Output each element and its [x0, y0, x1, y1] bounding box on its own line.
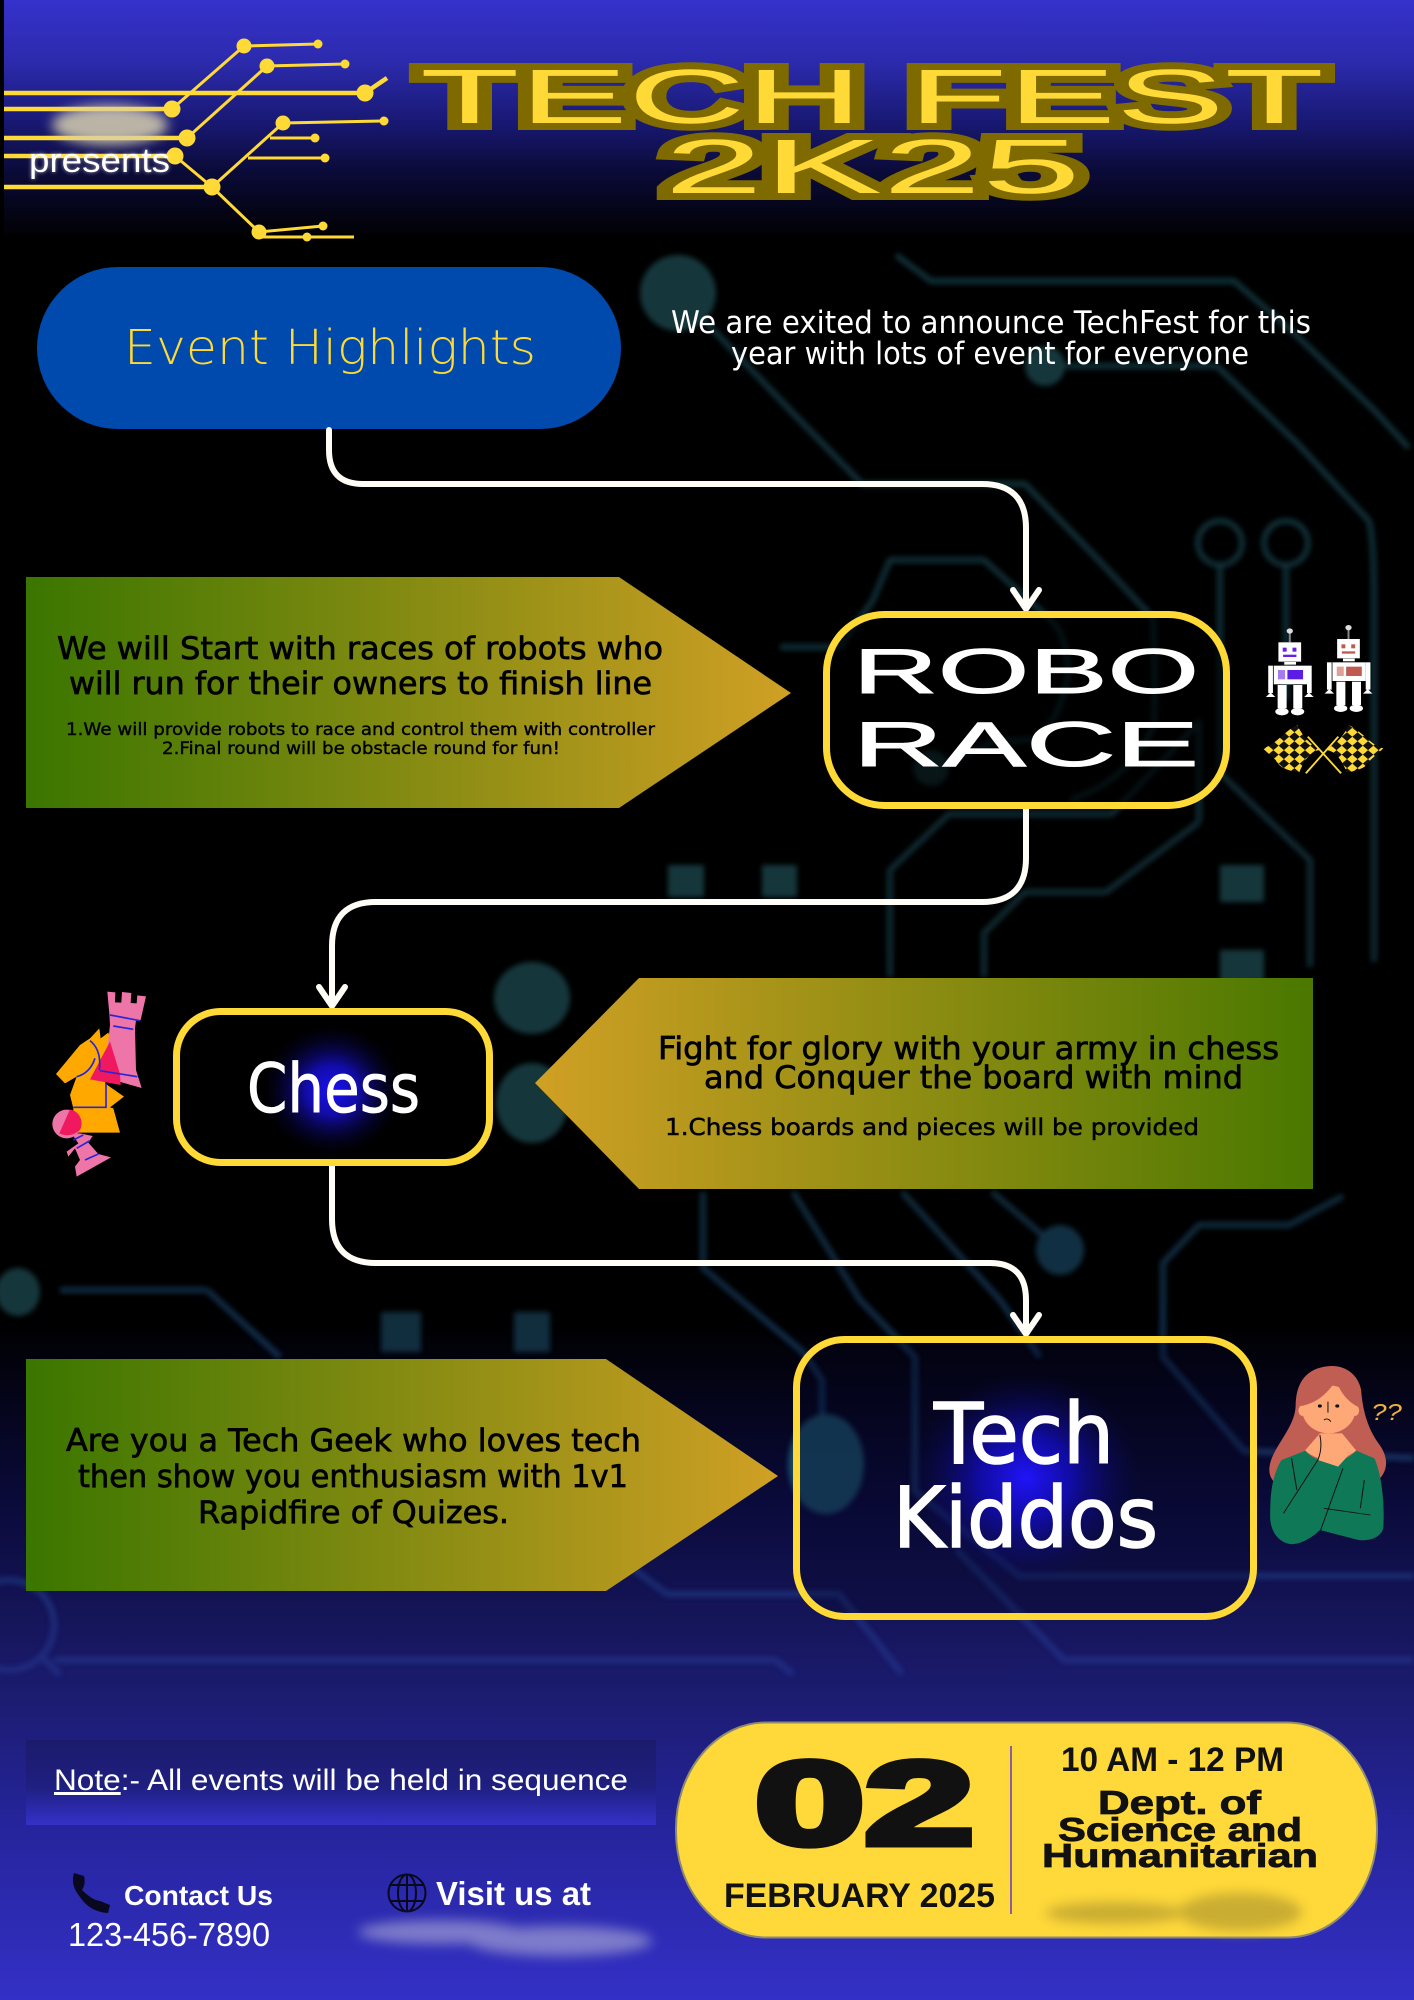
panel: robo race description: 2.Final round will be obstacle round for fun! — [162, 739, 560, 759]
circuit board background pattern — [0, 255, 1414, 1675]
visit us block: Visit us at — [436, 1875, 591, 1912]
arrow: robo race to chess — [319, 809, 1026, 1006]
title: 2K25 — [664, 124, 1081, 210]
title: TECH FEST — [420, 54, 1324, 140]
event highlights pill — [37, 267, 621, 429]
icon: checkered flags — [1263, 725, 1383, 773]
panel: tech kiddos description — [26, 1359, 778, 1591]
panel: chess description: 1.Chess boards and pieces will be provided — [665, 1115, 1199, 1141]
note band: Note:- All events will be held in sequence — [54, 1764, 628, 1797]
event highlights pill: Event Highlights — [124, 320, 536, 376]
tech kiddos box: Kiddos — [893, 1469, 1158, 1567]
date and venue pill: Humanitarian — [1042, 1837, 1318, 1874]
title — [420, 54, 1324, 210]
robo race box: RACE — [853, 710, 1199, 780]
date and venue pill — [676, 1722, 1377, 1938]
date and venue pill: FEBRUARY 2025 — [724, 1877, 995, 1915]
date and venue pill: 10 AM - 12 PM — [1061, 1741, 1284, 1779]
presents label: presents — [29, 142, 170, 180]
robo race box — [826, 614, 1226, 806]
panel: tech kiddos description: then show you enthusiasm with 1v1 — [78, 1459, 628, 1495]
date and venue pill: 02 — [755, 1738, 974, 1870]
icon: chess pieces — [52, 992, 146, 1177]
arrow: highlights to robo race — [329, 430, 1039, 609]
contact us block: 123-456-7890 — [68, 1916, 270, 1953]
icon: thinking girl: ?? — [1371, 1400, 1402, 1425]
redacted smudge over organiser name — [52, 105, 168, 145]
intro text: We are exited to announce TechFest for this — [671, 305, 1311, 341]
chess box — [176, 1012, 490, 1162]
intro text — [671, 305, 1311, 372]
icon: phone — [73, 1873, 110, 1913]
arrow: chess to tech kiddos — [332, 1166, 1039, 1334]
robo race box: ROBO — [853, 637, 1199, 707]
header circuit graphic — [4, 38, 388, 242]
panel: chess description: Fight for glory with your army in chess — [658, 1031, 1279, 1067]
intro text: year with lots of event for everyone — [731, 336, 1249, 372]
note band — [26, 1740, 656, 1825]
panel: robo race description: We will Start with races of robots who — [57, 631, 663, 667]
panel: robo race description: will run for their owners to finish line — [69, 666, 652, 702]
panel: robo race description: 1.We will provide robots to race and control them with controller — [66, 720, 655, 740]
panel: tech kiddos description: Are you a Tech Geek who loves tech — [66, 1423, 641, 1459]
contact us block: Contact Us — [124, 1880, 273, 1911]
contact us block — [68, 1873, 273, 1953]
panel: chess description — [535, 978, 1313, 1189]
tech kiddos box — [796, 1340, 1254, 1616]
date and venue pill: Science and — [1058, 1811, 1302, 1848]
icon: robots — [1266, 625, 1372, 715]
date and venue pill: Dept. of — [1098, 1784, 1262, 1821]
icon: thinking girl — [1269, 1366, 1402, 1544]
presents label: presents — [29, 142, 170, 180]
panel: chess description: and Conquer the board with mind — [704, 1060, 1243, 1096]
panel: tech kiddos description: Rapidfire of Quizes. — [198, 1495, 509, 1531]
chess box: Chess — [247, 1050, 420, 1129]
redacted smudge under visit us — [358, 1920, 652, 1956]
tech kiddos box: Tech — [933, 1385, 1114, 1483]
panel: robo race description — [26, 577, 791, 808]
icon: globe — [388, 1874, 426, 1912]
